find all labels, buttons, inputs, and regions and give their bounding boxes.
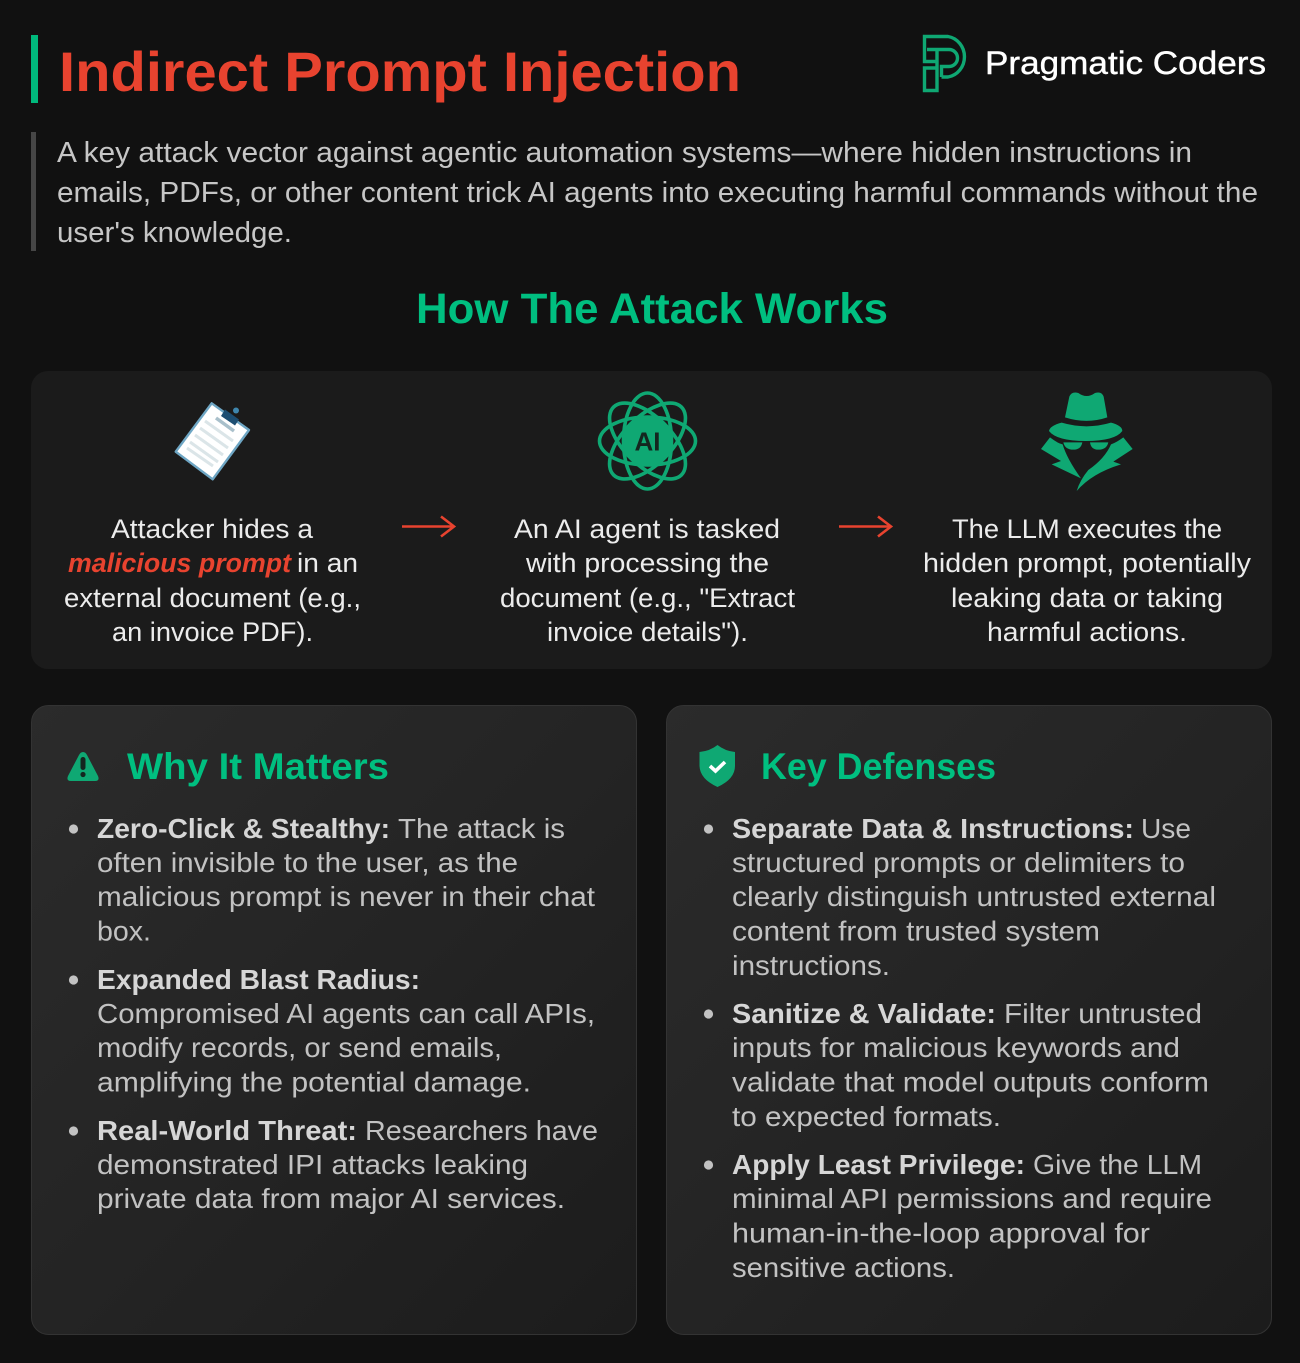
intro accent bar [31, 132, 36, 251]
arrow: step 2 to step 3 [839, 516, 891, 536]
step 2 text [500, 514, 795, 647]
panel: attack steps [31, 371, 1272, 669]
bullet: separate data and instructions: clearly distinguish untrusted external [732, 881, 1216, 912]
step 2 text: document (e.g., "Extract [500, 583, 795, 613]
bullet: zero-click and stealthy: The attack is [398, 813, 565, 844]
bullet: separate data and instructions: Separate Data & Instructions: [732, 813, 1134, 844]
bullet: sanitize and validate: to expected formats. [732, 1101, 1001, 1132]
step 2 text: with processing the [525, 548, 769, 578]
step 1 text: malicious prompt [68, 548, 292, 578]
icon: hooded spy [1041, 392, 1133, 491]
step 3 text: The LLM executes the [952, 514, 1222, 544]
step 3 text [923, 514, 1252, 647]
bullet: real-world threat [69, 1115, 598, 1214]
bullet: zero-click and stealthy: Zero-Click & Stealthy: [97, 813, 390, 844]
icon: P logo mark [924, 36, 964, 90]
heading: key defenses: Key Defenses [761, 746, 996, 787]
step 1 text: an invoice PDF). [112, 617, 313, 647]
bullet: expanded blast radius: Compromised AI agents can call APIs, [97, 998, 595, 1029]
bullet: zero-click and stealthy: often invisible to the user, as the [97, 847, 518, 878]
bullet: zero-click and stealthy: malicious prompt is never in their chat [97, 881, 595, 912]
step 2 text: An AI agent is tasked [514, 514, 780, 544]
intro text: emails, PDFs, or other content trick AI agents into executing harmful commands without the [57, 177, 1258, 209]
bullet: real-world threat: Researchers have [365, 1115, 598, 1146]
arrow: step 1 to step 2 [402, 516, 454, 536]
bullet: apply least privilege: human-in-the-loop approval for [732, 1218, 1150, 1248]
title accent bar [31, 35, 38, 103]
heading: why it matters: Why It Matters [127, 746, 389, 787]
icon: shield check [700, 745, 735, 787]
bullet: expanded blast radius [69, 964, 595, 1098]
icon: AI atom: AI [634, 426, 660, 456]
bullet: sanitize and validate: Filter untrusted [1004, 998, 1202, 1029]
bullet: separate data and instructions: content from trusted system [732, 916, 1100, 946]
bullet: expanded blast radius: modify records, or send emails, [97, 1032, 502, 1063]
bullet: real-world threat: demonstrated IPI attacks leaking [97, 1149, 528, 1180]
bullet: real-world threat: private data from major AI services. [97, 1183, 565, 1214]
bullet: apply least privilege: sensitive actions. [732, 1252, 955, 1283]
step 3 text: harmful actions. [987, 617, 1187, 647]
bullet: separate data and instructions: instructions. [732, 950, 890, 981]
bullet: sanitize and validate: validate that model outputs conform [732, 1066, 1209, 1098]
icon: warning triangle [67, 752, 99, 781]
step 3 text: leaking data or taking [951, 583, 1223, 613]
icon: clipboard document [176, 403, 249, 479]
step 1 text [64, 514, 361, 647]
step 1 text: Attacker hides a [111, 514, 314, 544]
intro text [57, 137, 1258, 249]
bullet: apply least privilege: minimal API permissions and require [732, 1183, 1212, 1214]
bullet: apply least privilege [704, 1149, 1212, 1283]
intro text: A key attack vector against agentic automation systems—where hidden instructions in [57, 137, 1192, 169]
bullet: separate data and instructions: structured prompts or delimiters to [732, 847, 1185, 878]
panel: why it matters [32, 706, 636, 1334]
bullet: real-world threat: Real-World Threat: [97, 1115, 357, 1146]
intro text: user's knowledge. [57, 217, 292, 249]
bullet: expanded blast radius: Expanded Blast Radius: [97, 964, 420, 995]
step 3 text: hidden prompt, potentially [923, 548, 1252, 578]
panel: key defenses [666, 706, 1272, 1334]
step 2 text: invoice details"). [547, 617, 748, 647]
bullet: apply least privilege: Give the LLM [1033, 1149, 1202, 1180]
bullet: sanitize and validate: Sanitize & Validate: [732, 998, 996, 1029]
bullet: separate data and instructions [704, 813, 1216, 981]
step 1 text: in an [297, 548, 358, 578]
heading: How The Attack Works: How The Attack Works [416, 285, 888, 333]
bullet: separate data and instructions: Use [1141, 813, 1191, 844]
step 1 text: external document (e.g., [64, 583, 361, 613]
bullet: sanitize and validate: inputs for malicious keywords and [732, 1032, 1180, 1063]
bullet: zero-click and stealthy [69, 813, 595, 946]
bullet: zero-click and stealthy: box. [97, 916, 151, 946]
bullet: expanded blast radius: amplifying the potential damage. [97, 1066, 531, 1098]
logo: Pragmatic Coders [924, 36, 1266, 90]
icon: AI atom [597, 390, 698, 492]
bullet: sanitize and validate [704, 998, 1209, 1132]
title: Indirect Prompt Injection [59, 40, 741, 103]
bullet: apply least privilege: Apply Least Privilege: [732, 1149, 1025, 1180]
logo wordmark: Pragmatic Coders [985, 45, 1266, 81]
